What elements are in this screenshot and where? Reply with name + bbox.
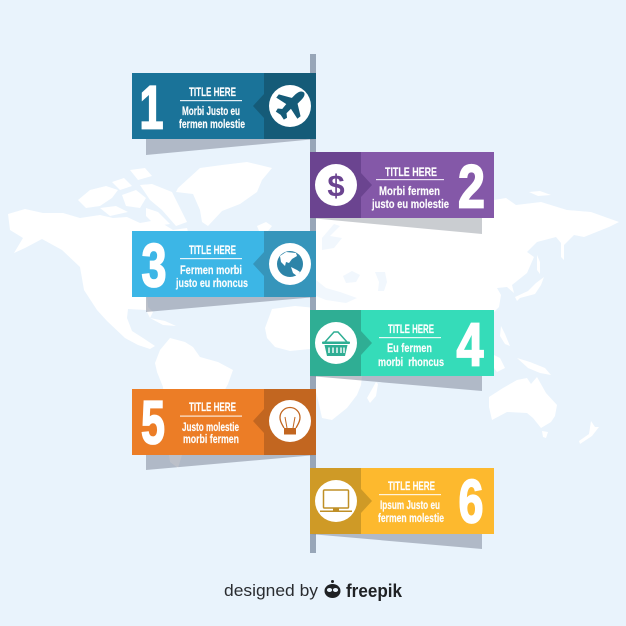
number 2: 2 <box>458 152 485 220</box>
number 4: 4 <box>456 310 484 378</box>
divider 3 <box>180 258 242 259</box>
card 1 <box>132 73 316 155</box>
ribbon 3 <box>132 231 316 297</box>
icon panel 1 <box>253 73 316 139</box>
icon panel 2 <box>310 152 372 218</box>
Madagascar <box>367 382 378 403</box>
divider 6 <box>379 494 441 495</box>
body line 4b: morbi rhoncus <box>378 357 444 369</box>
Australia <box>489 377 557 428</box>
Asian islands <box>529 191 551 196</box>
ribbon 4 <box>310 310 494 376</box>
title 6: TITLE HERE <box>388 479 435 493</box>
icon: dollar: $ <box>327 168 345 203</box>
body line 5a: Justo molestie <box>182 422 239 434</box>
Iceland <box>257 222 272 231</box>
card 6 <box>310 468 494 549</box>
ribbon 1 <box>132 73 316 139</box>
card 3 <box>132 231 316 312</box>
credit: designed by freepik <box>224 580 403 601</box>
shadow 6 <box>310 534 482 549</box>
shadow 1 <box>146 139 316 155</box>
number 1: 1 <box>140 74 164 142</box>
icon panel 6 <box>310 468 372 534</box>
icon panel 3 <box>253 231 316 297</box>
New Zealand <box>579 421 599 444</box>
card 2 <box>310 152 494 234</box>
title 2: TITLE HERE <box>385 165 437 179</box>
shadow 2 <box>310 218 482 234</box>
South America <box>155 338 233 468</box>
icon: globe <box>269 243 311 285</box>
card 5 <box>132 388 316 470</box>
body line 3b: justo eu rhoncus <box>175 278 248 290</box>
divider 2 <box>376 179 444 180</box>
icon: dollar <box>315 164 357 206</box>
freepik logo mark <box>324 580 340 598</box>
icon: light bulb <box>269 400 311 442</box>
body line 2b: justo eu molestie <box>371 199 449 211</box>
body line 3a: Fermen morbi <box>180 265 242 277</box>
number 5: 5 <box>141 388 165 456</box>
body line 6a: Ipsum Justo eu <box>380 500 440 512</box>
body line 1a: Morbi Justo eu <box>182 106 240 118</box>
ribbon 6 <box>310 468 494 534</box>
icon: monitor <box>315 480 357 522</box>
divider 4 <box>379 337 441 338</box>
designed by: designed by <box>224 582 319 600</box>
shadow 5 <box>146 455 316 470</box>
icon: airplane <box>269 85 311 127</box>
body line 6b: fermen molestie <box>378 513 444 525</box>
divider 5 <box>180 416 242 417</box>
ribbon 2 <box>310 152 494 218</box>
card 4 <box>310 310 494 391</box>
Greenland <box>176 162 272 226</box>
divider 1 <box>180 100 242 101</box>
timeline pole <box>310 54 316 553</box>
world map background <box>8 162 619 468</box>
body line 5b: morbi fermen <box>183 434 239 446</box>
number 6: 6 <box>458 468 484 536</box>
Eurasia <box>316 198 619 312</box>
body line 2a: Morbi fermen <box>379 186 440 198</box>
North America <box>8 209 190 349</box>
title 4: TITLE HERE <box>388 322 434 336</box>
icon: basket <box>315 322 357 364</box>
Cuba <box>150 318 176 326</box>
shadow 4 <box>310 376 482 391</box>
body line 4a: Eu fermen <box>387 343 432 355</box>
Arctic islands <box>78 186 118 208</box>
number 3: 3 <box>142 232 166 300</box>
freepik wordmark: freepik <box>346 581 403 601</box>
title 5: TITLE HERE <box>189 400 236 414</box>
shadow 3 <box>146 297 316 312</box>
ribbon 5 <box>132 389 316 455</box>
Africa <box>265 306 362 420</box>
title 1: TITLE HERE <box>189 85 236 99</box>
icon panel 5 <box>253 389 316 455</box>
icon panel 4 <box>310 310 372 376</box>
body line 1b: fermen molestie <box>179 119 245 131</box>
title 3: TITLE HERE <box>189 243 236 257</box>
map water details <box>316 224 387 303</box>
